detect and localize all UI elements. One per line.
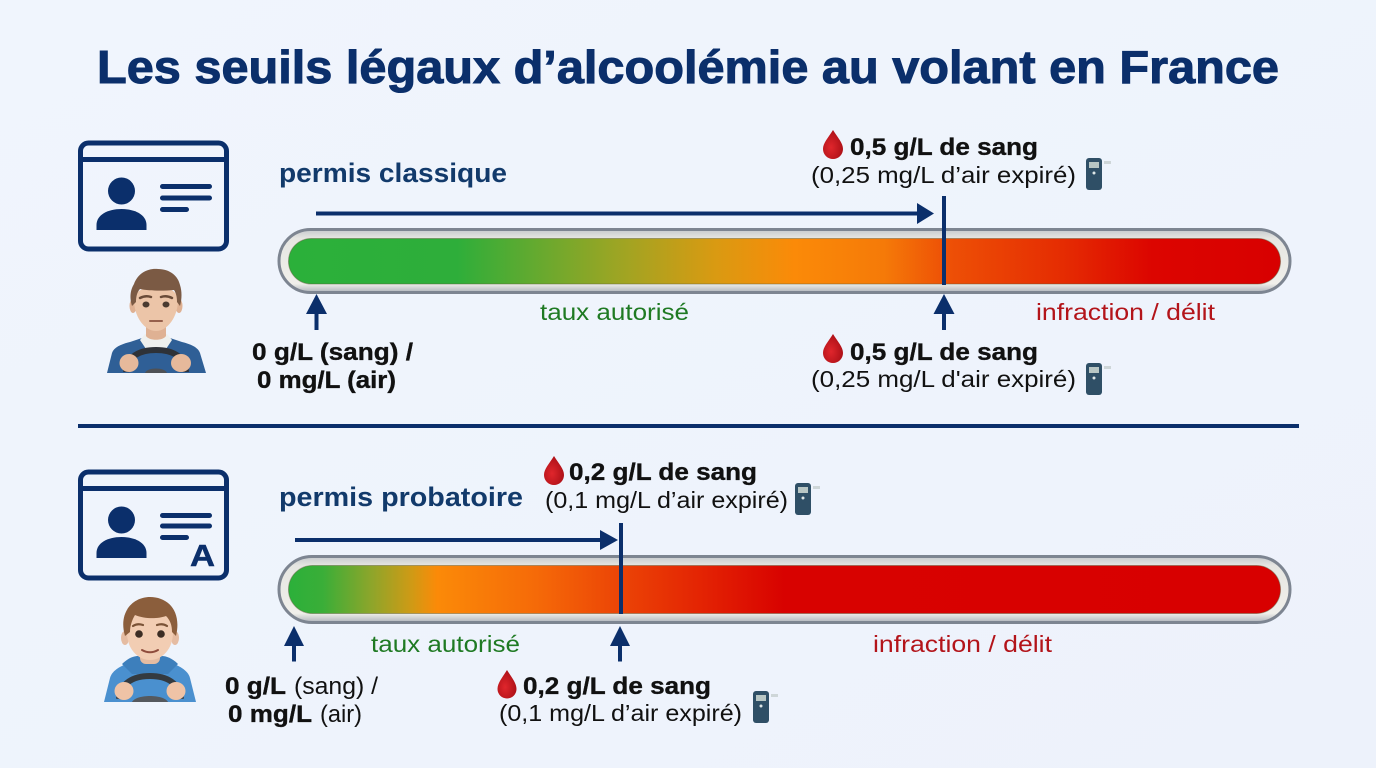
arrow: zero xyxy=(306,294,327,330)
zero label: 0 g/L (sang) / xyxy=(252,339,413,366)
label: infraction / délit: infraction / délit xyxy=(873,631,1053,657)
icon: adult driver xyxy=(107,269,206,373)
limit marker xyxy=(619,523,623,614)
zero label: 0 mg/L (air) xyxy=(257,367,396,394)
upper limit label: 0,5 g/L de sang xyxy=(850,134,1038,161)
lower limit label: (0,25 mg/L d'air expiré) xyxy=(811,366,1076,392)
icon: driving licence card xyxy=(80,143,227,249)
icon: blood drop xyxy=(823,130,843,159)
icon: blood drop xyxy=(823,334,843,363)
upper limit label: 0,2 g/L de sang xyxy=(569,459,757,486)
gauge bar xyxy=(279,230,1290,292)
icon: probationary licence card xyxy=(80,472,227,578)
panel: permis probatoire xyxy=(80,456,1290,728)
arrow: limit xyxy=(934,294,954,330)
arrow: range to limit xyxy=(295,530,618,550)
icon: blood drop xyxy=(544,456,564,485)
icon: breathalyser xyxy=(1086,158,1111,190)
upper limit label: (0,1 mg/L d’air expiré) xyxy=(545,487,788,513)
zero label: (sang) / xyxy=(294,673,378,700)
zero label: (air) xyxy=(320,701,362,728)
label: taux autorisé: taux autorisé xyxy=(540,299,689,325)
lower limit label: (0,1 mg/L d’air expiré) xyxy=(499,700,742,726)
upper limit label: (0,25 mg/L d’air expiré) xyxy=(811,162,1076,188)
zero label: 0 mg/L xyxy=(228,701,312,728)
lower limit label xyxy=(811,334,1111,395)
heading: permis probatoire: permis probatoire xyxy=(279,482,523,512)
icon: breathalyser xyxy=(1086,363,1111,395)
label: infraction / délit: infraction / délit xyxy=(1036,299,1216,325)
title: Les seuils légaux d’alcoolémie au volant en France xyxy=(97,41,1279,93)
zero label: 0 g/L xyxy=(225,673,286,700)
icon: breathalyser xyxy=(753,691,778,723)
icon: breathalyser xyxy=(795,483,820,515)
lower limit label xyxy=(498,670,778,726)
zero label xyxy=(252,339,413,394)
icon: blood drop xyxy=(498,670,516,698)
arrow: limit xyxy=(610,626,630,662)
icon: probationary licence card: A xyxy=(190,538,215,573)
icon: young driver xyxy=(104,597,196,702)
lower limit label: 0,2 g/L de sang xyxy=(523,673,711,700)
arrow: range to limit xyxy=(316,203,934,224)
zero label xyxy=(225,673,378,728)
limit marker xyxy=(942,196,946,285)
upper limit label xyxy=(544,456,820,515)
arrow: zero xyxy=(284,626,304,662)
heading: permis classique: permis classique xyxy=(279,158,507,188)
panel: permis classique xyxy=(80,130,1290,395)
upper limit label xyxy=(811,130,1111,190)
lower limit label: 0,5 g/L de sang xyxy=(850,339,1038,366)
gauge bar xyxy=(279,556,1290,622)
label: taux autorisé: taux autorisé xyxy=(371,631,520,657)
